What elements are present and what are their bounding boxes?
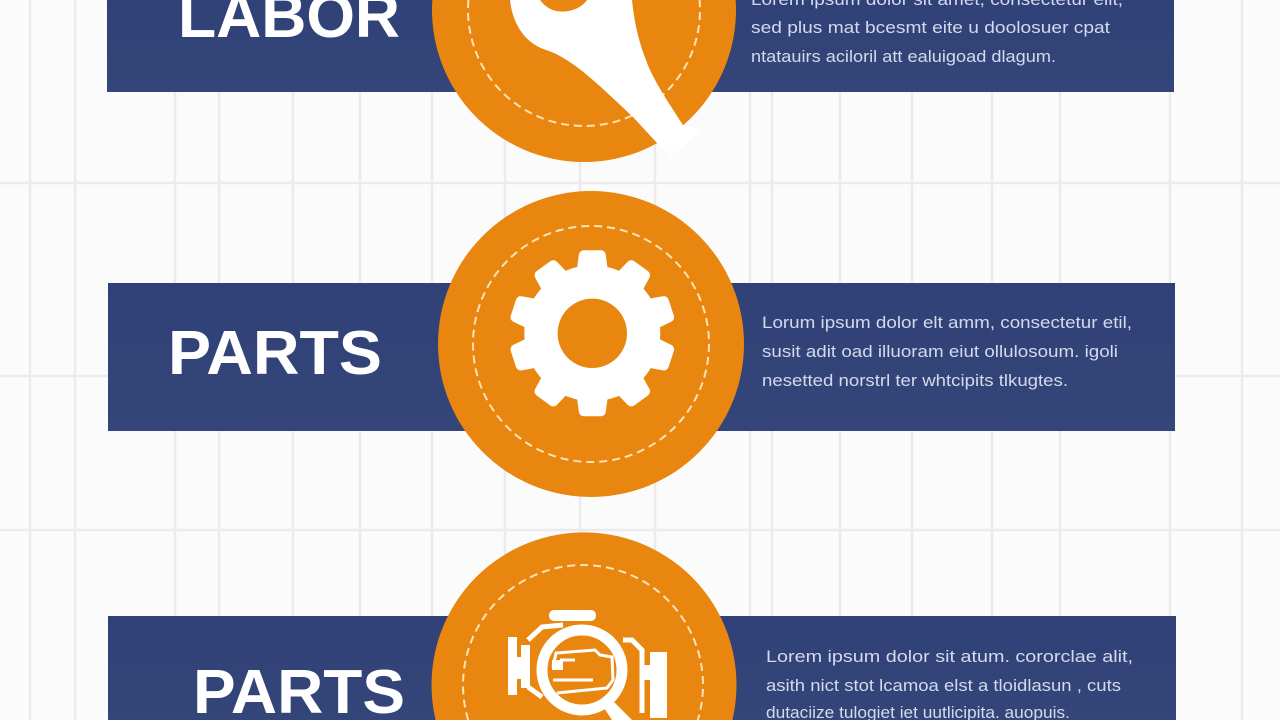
inspection dashed ring bbox=[463, 565, 703, 720]
parts description: susit adit oad illuoram eiut ollulosoum. igoli bbox=[762, 342, 1118, 361]
inspection banner bbox=[108, 616, 1176, 720]
labor description: sed plus mat bcesmt eite u doolosuer cpat bbox=[751, 18, 1110, 37]
labor description: ntatauirs aciloril att ealuigoad dlagum. bbox=[751, 47, 1056, 66]
parts description: nesetted norstrl ter whtcipits tlkugtes. bbox=[762, 371, 1068, 390]
inspection orange circle bbox=[432, 532, 737, 720]
icon: wrench bbox=[510, 0, 700, 156]
icon: gear bbox=[514, 255, 670, 411]
labor orange circle bbox=[432, 0, 736, 162]
labor dashed ring bbox=[468, 0, 700, 126]
labor banner bbox=[107, 0, 1174, 92]
icon: engine under magnifier bbox=[508, 610, 667, 720]
parts heading: PARTS bbox=[168, 319, 382, 388]
panel: parts inspection bbox=[108, 532, 1176, 720]
parts dashed ring bbox=[473, 226, 709, 462]
panel: labor bbox=[107, 0, 1174, 162]
parts description: Lorum ipsum dolor elt amm, consectetur etil, bbox=[762, 313, 1132, 332]
inspection description: Lorem ipsum dolor sit atum. cororclae alit, bbox=[766, 647, 1133, 666]
inspection description bbox=[766, 647, 1133, 720]
parts description bbox=[762, 313, 1132, 390]
panel: parts bbox=[108, 191, 1175, 497]
parts banner bbox=[108, 283, 1175, 431]
inspection description: asith nict stot lcamoa elst a tloidlasun , cuts bbox=[766, 676, 1121, 695]
labor description bbox=[751, 0, 1123, 66]
parts orange circle bbox=[438, 191, 744, 497]
